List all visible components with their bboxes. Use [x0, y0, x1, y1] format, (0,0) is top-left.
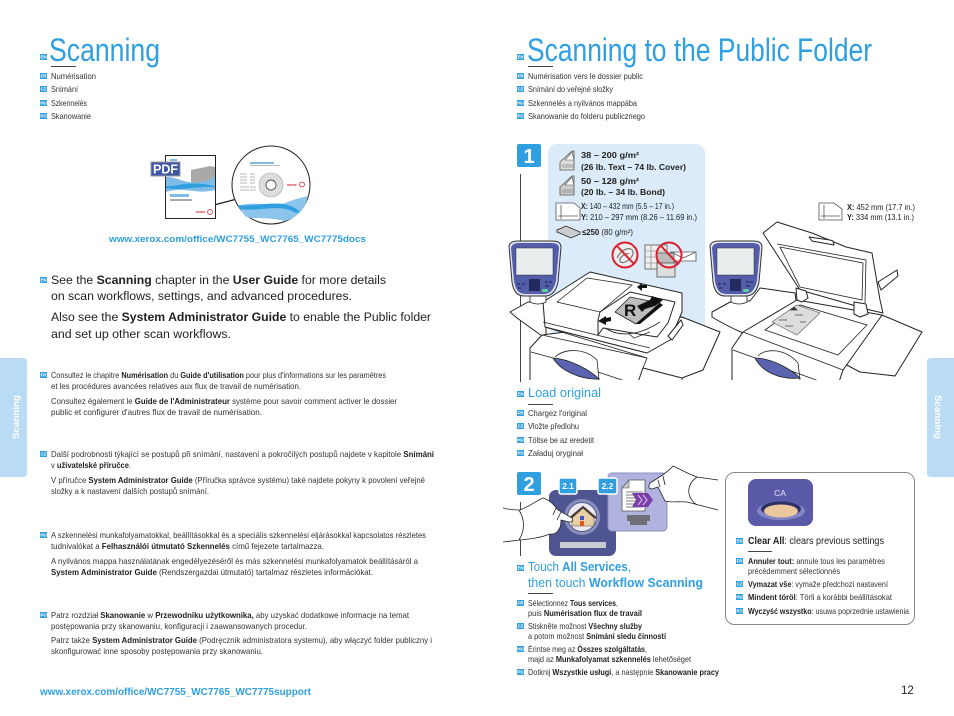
load original translations: FR [518, 411, 524, 416]
text block: French: public et configurer d'autres flux de travail de numérisation. [51, 408, 262, 417]
text block: Hungarian: tudnivalókat a Felhasználói útmutató Szkennelés című fejezete tartalmazza. [51, 542, 324, 551]
left side tab [0, 358, 27, 477]
feeder tray [598, 292, 675, 337]
load original translations: CZ [518, 424, 524, 429]
right side tab [927, 358, 954, 477]
step 1 badge [517, 144, 541, 168]
touch translations [517, 599, 719, 677]
text block: English: and set up other scan workflows. [51, 327, 231, 341]
text block: Czech: v uživatelské příručce. [51, 461, 131, 470]
specs text: 50 – 128 g/m² [581, 176, 639, 186]
glass specs: X: 452 mm (17.7 in.) [847, 202, 915, 212]
subtitle translations right: PO [517, 114, 524, 119]
badge 2.1: 2.1 [562, 481, 574, 491]
panel: Clear All [726, 472, 914, 624]
docs url: www.xerox.com/office/WC7755_WC7765_WC7775docs [108, 234, 366, 245]
step 2 badge: 2 [523, 474, 535, 496]
glass specs [847, 202, 915, 222]
clear all text: Mindent töröl: Törli a korábbi beállításokat [748, 593, 893, 602]
heading: touch instruction [517, 560, 703, 594]
text block: Polish: skonfigurować inne sposoby postępowania przy skanowaniu. [51, 647, 263, 656]
touch screen: all services button [549, 490, 616, 556]
text block: Hungarian: A nyilvános mappa használatának engedélyezéséről és más szkennelési munkafolyamatok beállításáról a [51, 557, 418, 566]
subtitle translations right: CZ [518, 87, 524, 92]
subtitle translations left: Numérisation [51, 72, 96, 81]
text block: Polish: Patrz rozdział Skanowanie w Przewodniku użytkownika, aby uzyskać dodatkowe informacje na temat [51, 611, 410, 620]
clear all text: HU [736, 595, 743, 600]
touch translations: puis Numérisation flux de travail [528, 609, 642, 618]
title: Scanning: Scanning [49, 32, 160, 68]
touch translations: Sélectionnez Tous services, [528, 599, 618, 608]
title: Scanning to the Public Folder: Scanning to the Public Folder [527, 32, 872, 68]
specs text: ≤250 (80 g/m²) [582, 227, 633, 237]
subtitle translations right: Numérisation vers le dossier public [528, 72, 643, 81]
clear all text: Vymazat vše: vymaže předchozí nastavení [748, 580, 889, 589]
subtitle translations left: CZ [41, 87, 47, 92]
subtitle translations right: Szkennelés a nyilvános mappába [528, 99, 637, 108]
load original translations: PO [517, 451, 524, 456]
icon: CA button: CA [774, 488, 786, 498]
heading: touch instruction: EN [517, 566, 524, 571]
load original translations: Chargez l'original [528, 409, 587, 418]
step 2 badge [517, 472, 541, 496]
touch screen: workflow scanning button [608, 473, 667, 531]
icon: no staples [612, 242, 638, 268]
text block: Hungarian: HU [40, 533, 47, 538]
badge 2.2: 2.2 [602, 481, 614, 491]
specs text: X: 140 – 432 mm (5.5 – 17 in.) [581, 201, 674, 211]
touch translations: HU [517, 647, 524, 652]
icon: PDF guide and CD: xerox [287, 183, 297, 187]
right tray and lower body [530, 317, 720, 385]
touch translations: Érintse meg az Összes szolgáltatás, [528, 644, 647, 654]
clear all text: Clear All: clears previous settings [748, 536, 884, 547]
illustration: printer with raised lid [712, 222, 922, 385]
icon: paper weight A [560, 151, 574, 170]
subtitle translations right: Snímání do veřejné složky [528, 85, 614, 94]
icon: CA button [748, 479, 813, 526]
icon: paper weight B [560, 176, 574, 195]
text block: English [40, 273, 431, 341]
subtitle translations right: Skanowanie do folderu publicznego [528, 112, 645, 121]
subtitle translations right: HU [517, 101, 524, 106]
left tray [510, 302, 546, 336]
text block: Polish: Patrz także System Administrator Guide (Podręcznik administratora systemu), aby włączyć folder publiczny i [51, 636, 432, 645]
specs text [581, 150, 697, 237]
text block: Czech [40, 449, 435, 496]
heading: touch instruction: then touch Workflow Scanning [528, 576, 703, 590]
touch translations: CZ [518, 624, 524, 629]
text block: French: Consultez également le Guide de l'Administrateur système pour savoir comment activer le dossier [51, 397, 397, 406]
icon: size diagram [556, 203, 580, 220]
touch translations: a potom možnost Snímání sledu činností [528, 632, 667, 641]
page number: 12 [901, 685, 914, 697]
feeder body [543, 272, 682, 353]
clear all text: PO [736, 609, 743, 614]
text block: Czech: V příručce System Administrator Guide (Příručka správce systému) také najdete pokyny k povolení veřejné [51, 476, 425, 485]
badge 2.1 [559, 478, 577, 494]
subtitle translations left: FR [41, 74, 47, 79]
icon: left hand [503, 498, 573, 542]
blue handle [553, 358, 599, 379]
text block: Hungarian [40, 531, 426, 577]
glass specs: Y: 334 mm (13.1 in.) [847, 212, 914, 222]
step 1 vertical line [520, 174, 521, 382]
clear all text: FR [737, 559, 743, 564]
heading: Load original: EN [517, 392, 524, 397]
subtitle translations left: Szkennelés [51, 99, 87, 108]
icon: glass size diagram [819, 203, 842, 220]
touch translations: Stiskněte možnost Všechny služby [528, 622, 642, 631]
icon: paper stack [557, 226, 580, 238]
text block: Polish: PO [40, 613, 47, 618]
clear all text: CZ [737, 582, 743, 587]
text block: Polish: postępowania przy skanowaniu, konfiguracji i zaawansowanych procedur. [51, 622, 307, 631]
step 1 badge: 1 [523, 146, 535, 168]
subtitle translations left [40, 72, 96, 121]
title: Scanning: EN [40, 55, 47, 60]
badge 2.2 [598, 478, 617, 494]
title: Scanning to the Public Folder: EN [517, 55, 524, 60]
icon: PDF guide and CD: PDF [153, 162, 178, 176]
clear all text: EN [736, 539, 743, 544]
clear all text: Wyczyść wszystko: usuwa poprzednie ustawienia [748, 607, 909, 616]
text block: English: See the Scanning chapter in the User Guide for more details [51, 273, 386, 287]
touch translations: PO [517, 670, 524, 675]
text block: French: et les procédures avancées relatives aux flux de travail de numérisation. [51, 382, 301, 391]
subtitle translations right [517, 72, 645, 121]
specs text: Y: 210 – 297 mm (8.26 – 11.69 in.) [581, 212, 697, 222]
specs text: 38 – 200 g/m² [581, 150, 639, 160]
footer url: www.xerox.com/office/WC7755_WC7765_WC7775support [39, 686, 311, 698]
icon: no mixed media [645, 242, 696, 277]
load original translations: Załaduj oryginał [528, 449, 583, 458]
heading: Load original: Load original [528, 386, 601, 400]
touch translations: FR [518, 601, 524, 606]
load original translations: Vložte předlohu [528, 422, 579, 431]
heading: Load original [517, 386, 601, 405]
text block: English: on scan workflows, settings, and advanced procedures. [51, 289, 352, 303]
subtitle translations left: Skanowanie [51, 112, 91, 121]
clear all text [736, 536, 909, 616]
text block: Czech: složky a k nastavení dalších postupů snímání. [51, 486, 209, 496]
subtitle translations left: Snímání [51, 85, 79, 94]
arrows [598, 283, 663, 325]
heading: touch instruction: Touch All Services, [528, 560, 631, 574]
text block: Polish [40, 611, 432, 656]
text block: Czech: CZ [41, 452, 47, 457]
text block: French: FR [41, 373, 47, 378]
subtitle translations left: PO [40, 114, 47, 119]
document with R [615, 297, 660, 324]
right side tab: Scanning [933, 395, 943, 439]
touch translations: Dotknij Wszystkie usługi, a następnie Skanowanie pracy [528, 668, 719, 677]
load original translations: Töltse be az eredetit [528, 436, 595, 445]
clear all text: précédemment sélectionnés [748, 567, 840, 576]
text block: Czech: Další podrobnosti týkající se postupů při snímání, nastavení a pokročilých postupů najdete v kapitole Snímání [51, 449, 435, 459]
text block: French: Consultez le chapitre Numérisation du Guide d'utilisation pour plus d'informations sur les paramètres [51, 371, 386, 380]
text block: English: EN [40, 278, 47, 283]
specs text: (20 lb. – 34 lb. Bond) [581, 187, 665, 197]
icon: PDF guide and CD: xerox [196, 210, 205, 214]
subtitle translations right: FR [518, 74, 524, 79]
icon: control panel left [509, 241, 561, 304]
text block: Hungarian: A szkennelési munkafolyamatokkal, beállításokkal és a speciális szkennelési eljárásokkal kapcsolatos részletes [51, 531, 426, 540]
illustration: printer with document feeder: R [624, 301, 636, 320]
text block: Hungarian: System Administrator Guide (Rendszergazdai útmutató) tartalmaz részletes információkat. [51, 568, 373, 577]
icon: right hand [649, 466, 718, 510]
load original translations [517, 409, 595, 458]
text block: English: Also see the System Administrator Guide to enable the Public folder [51, 310, 431, 324]
text block: French [40, 371, 397, 417]
illustration: printer with document feeder [510, 272, 720, 385]
icon: PDF guide and CD [151, 146, 310, 224]
clear all text: Annuler tout: annule tous les paramètres [748, 557, 885, 566]
touch translations: majd az Munkafolyamat szkennelés lehetőséget [528, 655, 692, 664]
left side tab: Scanning [11, 395, 21, 439]
panel: paper specifications [548, 144, 705, 334]
subtitle translations left: HU [40, 101, 47, 106]
specs text: (26 lb. Text – 74 lb. Cover) [581, 162, 686, 172]
icon: control panel right [710, 241, 762, 304]
load original translations: HU [517, 438, 524, 443]
step 2 vertical line [520, 502, 521, 556]
